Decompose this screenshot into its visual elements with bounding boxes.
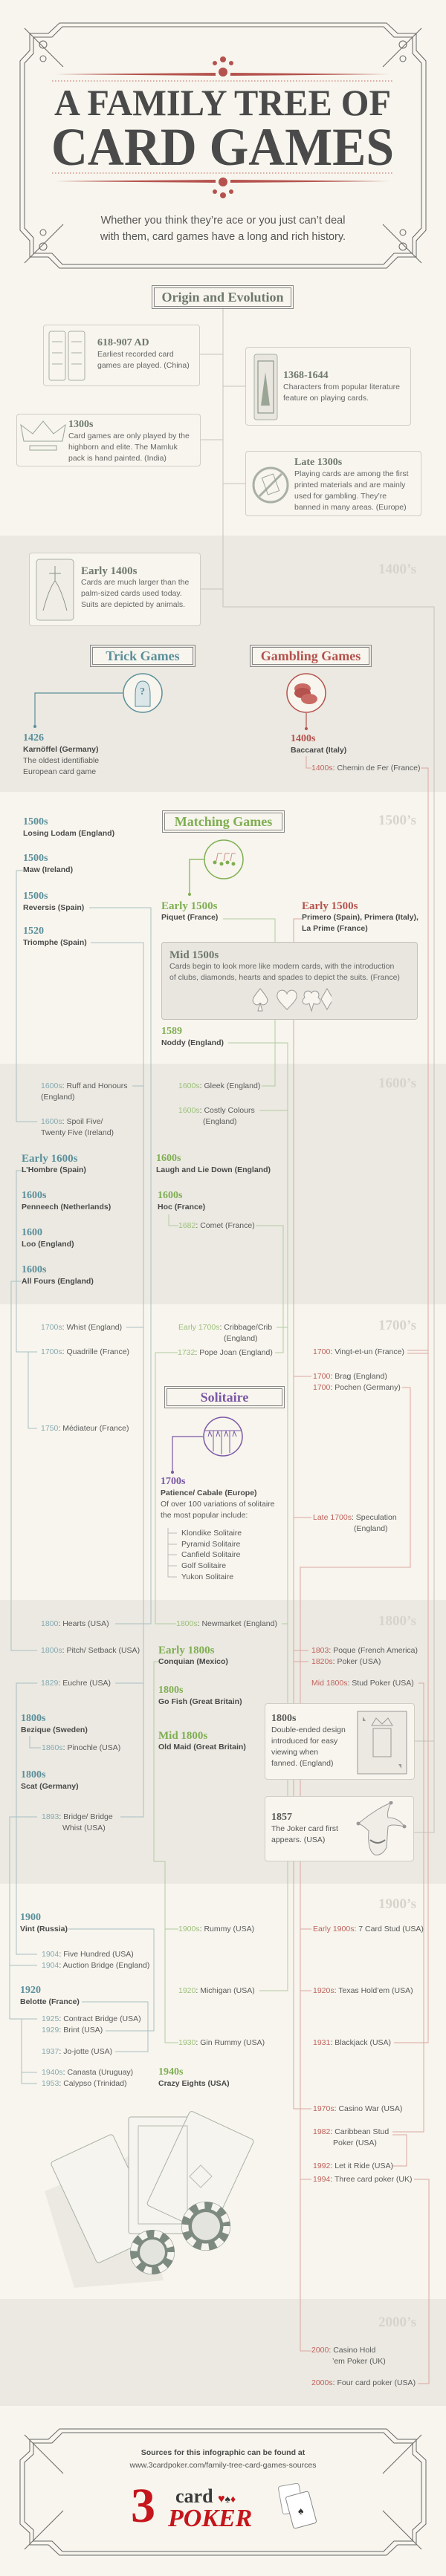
box: 1857 joker: appears. (USA)	[271, 1835, 325, 1844]
text: Penneech (Netherlands)	[22, 1203, 111, 1211]
box: Mid 1500s: Cards begin to look more like modern cards, with the introduction	[169, 962, 394, 971]
1900s items	[20, 1912, 68, 1933]
text: 1970s: Casino War (USA)	[313, 2104, 402, 2113]
badge: Solitaire	[167, 1388, 282, 1406]
text: (England)	[224, 1334, 258, 1343]
text: Patience: 1700s	[161, 1476, 185, 1487]
text: 1426 Karnöffel: The oldest identifiable	[23, 756, 99, 765]
text: L’Hombre (Spain)	[22, 1165, 86, 1174]
box: Early 1400s	[29, 553, 201, 626]
text: Belotte (France)	[20, 1997, 80, 2006]
text: 1600s: Costly Colours	[178, 1106, 255, 1115]
text: Canfield Solitaire	[181, 1550, 240, 1559]
text: Golf Solitaire	[181, 1561, 226, 1570]
box: 1300s	[16, 414, 201, 466]
box: Late 1300s: used for gambling. They’re	[294, 492, 387, 501]
text: Klondike Solitaire	[181, 1529, 242, 1538]
text: 1931: Blackjack (USA)	[313, 2038, 391, 2047]
text: 1426 Karnöffel: 1426	[23, 732, 44, 744]
1500s left column: Losing Lodam (England)	[23, 829, 114, 838]
icon: matching	[204, 839, 244, 879]
sources text: www.3cardpoker.com/family-tree-card-games-sources	[130, 2461, 316, 2470]
text: 1426 Karnöffel: Karnöffel (Germany)	[23, 745, 99, 754]
text: 1940s: Canasta (Uruguay)	[42, 2068, 133, 2077]
box: Late 1300s: banned in many areas. (Europe)	[294, 503, 407, 512]
text: 1700’s	[378, 1318, 416, 1333]
box: 1800s double-ended: Double-ended design	[271, 1726, 346, 1734]
text: 1829: Euchre (USA)	[41, 1679, 111, 1688]
box: 1857 joker: 1857	[271, 1812, 292, 1823]
badge: Solitaire: Solitaire	[201, 1390, 248, 1405]
text: Patience: the most popular include:	[161, 1511, 248, 1520]
text: 1600s	[158, 1190, 182, 1201]
subtitle: with them, card games have a long and rich history.	[100, 231, 346, 243]
logo: 3 card poker: 3	[131, 2479, 155, 2533]
text: Old Maid (Great Britain)	[158, 1743, 246, 1752]
text: 1700: Brag (England)	[313, 1372, 387, 1381]
text: Yukon Solitaire	[181, 1572, 233, 1581]
badge: Matching Games	[164, 813, 282, 830]
subtitle: Whether you think they’re ace or you just can’t deal	[101, 215, 345, 227]
box: 1300s: highborn and elite. The Mamluk	[68, 443, 178, 452]
box: 618-907 AD	[43, 325, 200, 386]
logo: 3 card poker: ♠	[298, 2505, 304, 2517]
text: (England)	[354, 1524, 388, 1533]
text: Conquian (Mexico)	[158, 1657, 228, 1666]
text: Early 1600s	[22, 1153, 77, 1165]
text: 1682: Comet (France)	[178, 1221, 255, 1230]
2000s items: 2000: Casino Hold	[311, 2346, 375, 2355]
footer frame	[19, 2429, 427, 2555]
text: All Fours (England)	[22, 1277, 94, 1286]
Early 1500s Primero	[302, 900, 418, 933]
text: Hoc (France)	[158, 1203, 205, 1211]
text: 1800s	[21, 1769, 45, 1780]
1900s items: Vint (Russia)	[20, 1925, 68, 1933]
box: Late 1300s: Late 1300s	[294, 457, 342, 468]
text: 1732: Pope Joan (England)	[178, 1348, 273, 1357]
text: 2000s: Four card poker (USA)	[311, 2378, 416, 2387]
icon: chips	[286, 673, 326, 713]
box: 1800s double-ended: viewing when	[271, 1748, 318, 1757]
text: 1750: Médiateur (France)	[41, 1424, 129, 1433]
text: 1600s	[156, 1153, 181, 1164]
logo: 3 card poker: card ♥♠♦	[175, 2485, 236, 2507]
text: 1400s Baccarat: 1400s	[291, 733, 315, 744]
text: 1700s: Quadrille (France)	[41, 1347, 129, 1356]
text: 1900s: Rummy (USA)	[178, 1925, 254, 1933]
logo: 3 card poker: POKER	[168, 2505, 252, 2532]
header frame	[19, 22, 427, 269]
text: (England)	[203, 1117, 237, 1126]
text: 1940s	[158, 2066, 183, 2078]
2000s items	[311, 2346, 386, 2366]
Early 1500s Primero: La Prime (France)	[302, 924, 368, 933]
box: Late 1300s: printed materials and are mainly	[294, 481, 405, 489]
text: Crazy Eights (USA)	[158, 2079, 230, 2088]
text: Go Fish (Great Britain)	[158, 1697, 242, 1706]
icon: trick head: ?	[140, 686, 145, 697]
text: 1589	[161, 1026, 182, 1037]
box: 1857 joker: The Joker card first	[271, 1824, 338, 1833]
text: 1800s: Newmarket (England)	[176, 1619, 277, 1628]
text: 1600s: Spoil Five/	[41, 1117, 103, 1126]
1800s items: 1800: Hearts (USA)	[41, 1619, 109, 1628]
2000s items: ’em Poker (UK)	[332, 2357, 386, 2366]
text: 1929: Brint (USA)	[42, 2026, 103, 2035]
box: 1368-1644	[245, 347, 411, 426]
text: 1994: Three card poker (UK)	[313, 2175, 412, 2184]
box: Early 1400s: palm-sized cards used today.	[81, 589, 182, 598]
text: Triomphe (Spain)	[23, 938, 87, 947]
1500s left column	[23, 816, 114, 838]
text: Poker (USA)	[333, 2138, 377, 2147]
1700s items: 1700s: Whist (England)	[41, 1323, 122, 1332]
text: 1893: Bridge/ Bridge	[42, 1812, 113, 1821]
title	[51, 82, 394, 171]
subtitle	[100, 215, 346, 243]
box: 1300s: Card games are only played by the	[68, 432, 190, 440]
text: 1500’s	[378, 813, 416, 828]
text: Pyramid Solitaire	[181, 1540, 240, 1549]
text: 1800s: Pitch/ Setback (USA)	[41, 1646, 140, 1655]
box: 618-907 AD: 618-907 AD	[97, 337, 149, 348]
text: Twenty Five (Ireland)	[41, 1128, 114, 1137]
icon: king card	[357, 1711, 407, 1774]
1900s items: 1900	[20, 1912, 41, 1923]
badge: Matching Games: Matching Games	[175, 814, 272, 829]
box: 1300s: pack is hand painted. (India)	[68, 454, 167, 463]
badge: Trick Games	[92, 647, 193, 665]
text: Whist (USA)	[62, 1824, 106, 1832]
text: Late 1700s: Speculation	[313, 1513, 397, 1522]
text: 1600s	[22, 1264, 46, 1275]
text: Reversis (Spain)	[23, 903, 84, 912]
box: 618-907 AD: Earliest recorded card	[97, 350, 174, 359]
text: Mid 1800s: Stud Poker (USA)	[311, 1679, 414, 1688]
text: 1920s: Texas Hold’em (USA)	[313, 1986, 413, 1995]
text: 1904: Five Hundred (USA)	[42, 1950, 134, 1959]
text: 1930: Gin Rummy (USA)	[178, 2038, 265, 2047]
box: Early 1400s: Suits are depicted by animals.	[81, 600, 185, 609]
sources text: Sources for this infographic can be found at	[141, 2448, 305, 2457]
text: 1426 Karnöffel	[23, 732, 99, 776]
box: Mid 1500s	[161, 942, 418, 1020]
text: 1953: Calypso (Trinidad)	[42, 2079, 127, 2088]
text: 1800’s	[378, 1613, 416, 1629]
text: 1803: Poque (French America)	[311, 1646, 418, 1655]
box: Late 1300s: Playing cards are among the first	[294, 469, 409, 478]
box: Late 1300s	[245, 451, 421, 516]
text: 1400s Baccarat	[291, 733, 346, 755]
text: Bezique (Sweden)	[21, 1726, 88, 1734]
text: 1904: Auction Bridge (England)	[42, 1961, 149, 1970]
box: 618-907 AD: games are played. (China)	[97, 361, 190, 370]
decade labels: 1400’s	[378, 562, 416, 577]
text: Patience: Of over 100 variations of solitaire	[161, 1500, 275, 1509]
box: 1800s double-ended	[265, 1703, 415, 1780]
box: 1368-1644: feature on playing cards.	[283, 394, 369, 403]
box: Early 1400s: Early 1400s	[81, 565, 137, 577]
text: 1900’s	[378, 1896, 416, 1912]
text: 2000’s	[378, 2315, 416, 2330]
text: 1800s	[21, 1713, 45, 1724]
1500s left column: 1500s	[23, 816, 48, 827]
text: Early 1900s: 7 Card Stud (USA)	[313, 1925, 424, 1933]
text: Loo (England)	[22, 1240, 74, 1249]
1600s items	[41, 1082, 128, 1102]
text: 1920	[20, 1985, 41, 1996]
text: 1520	[23, 926, 44, 937]
badge: Trick Games: Trick Games	[106, 648, 180, 663]
text: 1992: Let it Ride (USA)	[313, 2162, 393, 2170]
1600s items: 1600s: Ruff and Honours	[41, 1082, 128, 1090]
text: 1500s	[23, 891, 48, 902]
box: 1300s: 1300s	[68, 419, 93, 430]
box: Mid 1500s: of clubs, diamonds, hearts and spades to depict the suits. (France)	[169, 973, 400, 982]
box: Early 1400s: Cards are much larger than the	[81, 578, 189, 587]
box: 1368-1644: Characters from popular literature	[283, 383, 400, 391]
text: 1400s Baccarat: Baccarat (Italy)	[291, 746, 346, 755]
text: 1426 Karnöffel: European card game	[23, 767, 96, 776]
Early 1500s Primero: Early 1500s	[302, 900, 358, 912]
text: 1700: Pochen (Germany)	[313, 1383, 401, 1392]
badge: Gambling Games: Gambling Games	[261, 648, 361, 663]
text: 1600’s	[378, 1076, 416, 1091]
text: 1860s: Pinochle (USA)	[42, 1743, 120, 1752]
text: Laugh and Lie Down (England)	[156, 1165, 271, 1174]
Early 1500s Piquet: Piquet (France)	[161, 913, 218, 922]
text: 1600s	[22, 1190, 46, 1201]
text: Maw (Ireland)	[23, 865, 73, 874]
Early 1500s Piquet	[161, 900, 218, 922]
text: Mid 1800s	[158, 1730, 207, 1742]
text: 1700: Vingt-et-un (France)	[313, 1347, 404, 1356]
illustration: cards and chips	[45, 2111, 254, 2288]
box: 1368-1644: 1368-1644	[283, 370, 329, 381]
box: Mid 1500s: Mid 1500s	[169, 949, 219, 961]
text: 1500s	[23, 853, 48, 864]
text: Chemin de Fer: 1400s: Chemin de Fer (France)	[311, 764, 420, 773]
Early 1500s Piquet: Early 1500s	[161, 900, 217, 912]
text: 1820s: Poker (USA)	[311, 1657, 381, 1666]
text: Patience	[161, 1476, 275, 1520]
text: Patience: Patience/ Cabale (Europe)	[161, 1489, 257, 1497]
title: A FAMILY TREE OF	[54, 82, 391, 123]
text: Scat (Germany)	[21, 1782, 79, 1791]
1600s items: (England)	[41, 1093, 75, 1102]
Early 1500s Primero: Primero (Spain), Primera (Italy),	[302, 913, 418, 922]
badge: Origin and Evolution	[154, 287, 291, 307]
box: 1857 joker	[265, 1796, 414, 1861]
box: 1800s double-ended: 1800s	[271, 1713, 296, 1724]
icon: solitaire	[203, 1417, 243, 1457]
icon: joker	[357, 1801, 406, 1855]
badge: Origin and Evolution: Origin and Evolution	[161, 290, 284, 305]
text: 1800s	[158, 1685, 183, 1696]
text: Early 1700s: Cribbage/Crib	[178, 1323, 272, 1332]
icon: trick head	[123, 673, 163, 713]
logo: 3 card poker	[131, 2479, 317, 2533]
box: 1800s double-ended: fanned. (England)	[271, 1759, 333, 1768]
text: 1925: Contract Bridge (USA)	[42, 2014, 141, 2023]
text: 1920: Michigan (USA)	[178, 1986, 255, 1995]
box: 1800s double-ended: introduced for easy	[271, 1737, 337, 1746]
text: Noddy (England)	[161, 1038, 224, 1047]
text: 1600	[22, 1227, 42, 1238]
text: 1600s: Gleek (England)	[178, 1082, 260, 1090]
sources text	[129, 2448, 317, 2470]
text: 1937: Jo-jotte (USA)	[42, 2047, 112, 2056]
icon: suits	[253, 988, 332, 1012]
text: Early 1800s	[158, 1645, 214, 1656]
text: 1982: Caribbean Stud	[313, 2127, 389, 2136]
